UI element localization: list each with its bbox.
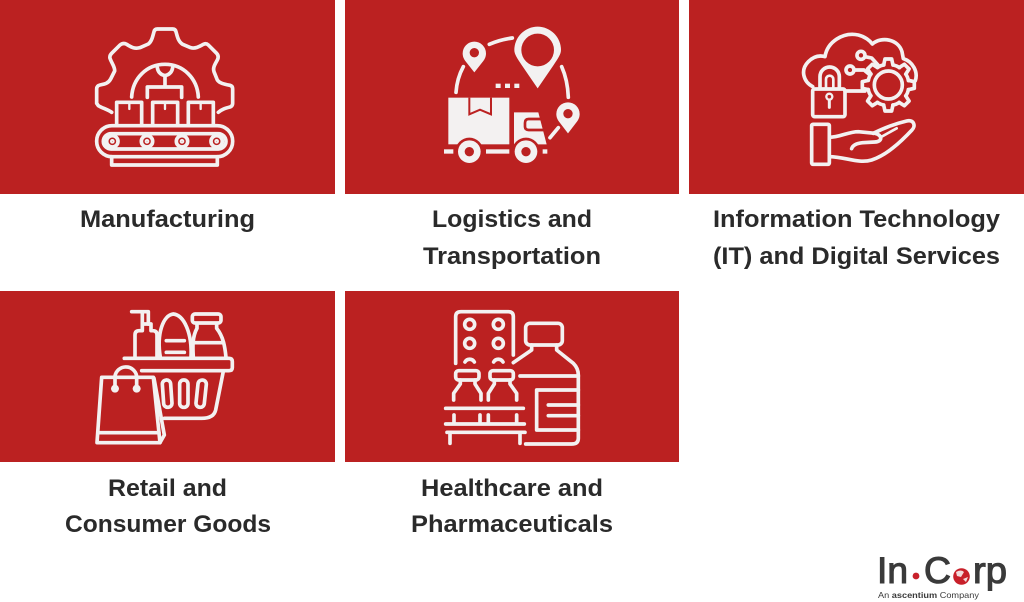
heading: healthcare (411, 475, 613, 538)
heading: information technology: Information Technology (713, 206, 1001, 233)
panel: information technology (689, 0, 1024, 194)
panel: retail (0, 291, 335, 462)
heading: manufacturing: Manufacturing (80, 206, 255, 233)
icon: globe (953, 568, 970, 585)
icon: delivery truck and map pins (444, 27, 580, 166)
icon: cloud, padlock, gear and hand (804, 34, 916, 164)
heading: information technology (713, 206, 1001, 270)
heading: logistics: Transportation (423, 243, 601, 270)
panel: healthcare (345, 291, 679, 462)
heading: retail: Consumer Goods (65, 511, 271, 538)
icon: pills and medicine bottles (446, 312, 578, 444)
icon: gear with conveyor belt (97, 29, 233, 165)
heading: healthcare: Healthcare and (421, 475, 603, 502)
logo: InCorp: An ascentium Company (878, 590, 980, 600)
icon: shopping bag and grocery basket (97, 312, 232, 443)
logo: InCorp: rp (973, 550, 1007, 591)
logo: InCorp: C (924, 550, 951, 591)
heading: information technology: (IT) and Digital Services (713, 243, 1000, 270)
logo: InCorp: In (877, 550, 908, 591)
panel: logistics (345, 0, 679, 194)
heading: healthcare: Pharmaceuticals (411, 511, 613, 538)
heading: logistics: Logistics and (432, 206, 592, 233)
heading: logistics (423, 206, 601, 270)
heading: retail: Retail and (108, 475, 227, 502)
logo: InCorp (877, 550, 1007, 600)
panel: manufacturing (0, 0, 335, 194)
heading: retail (65, 475, 271, 538)
